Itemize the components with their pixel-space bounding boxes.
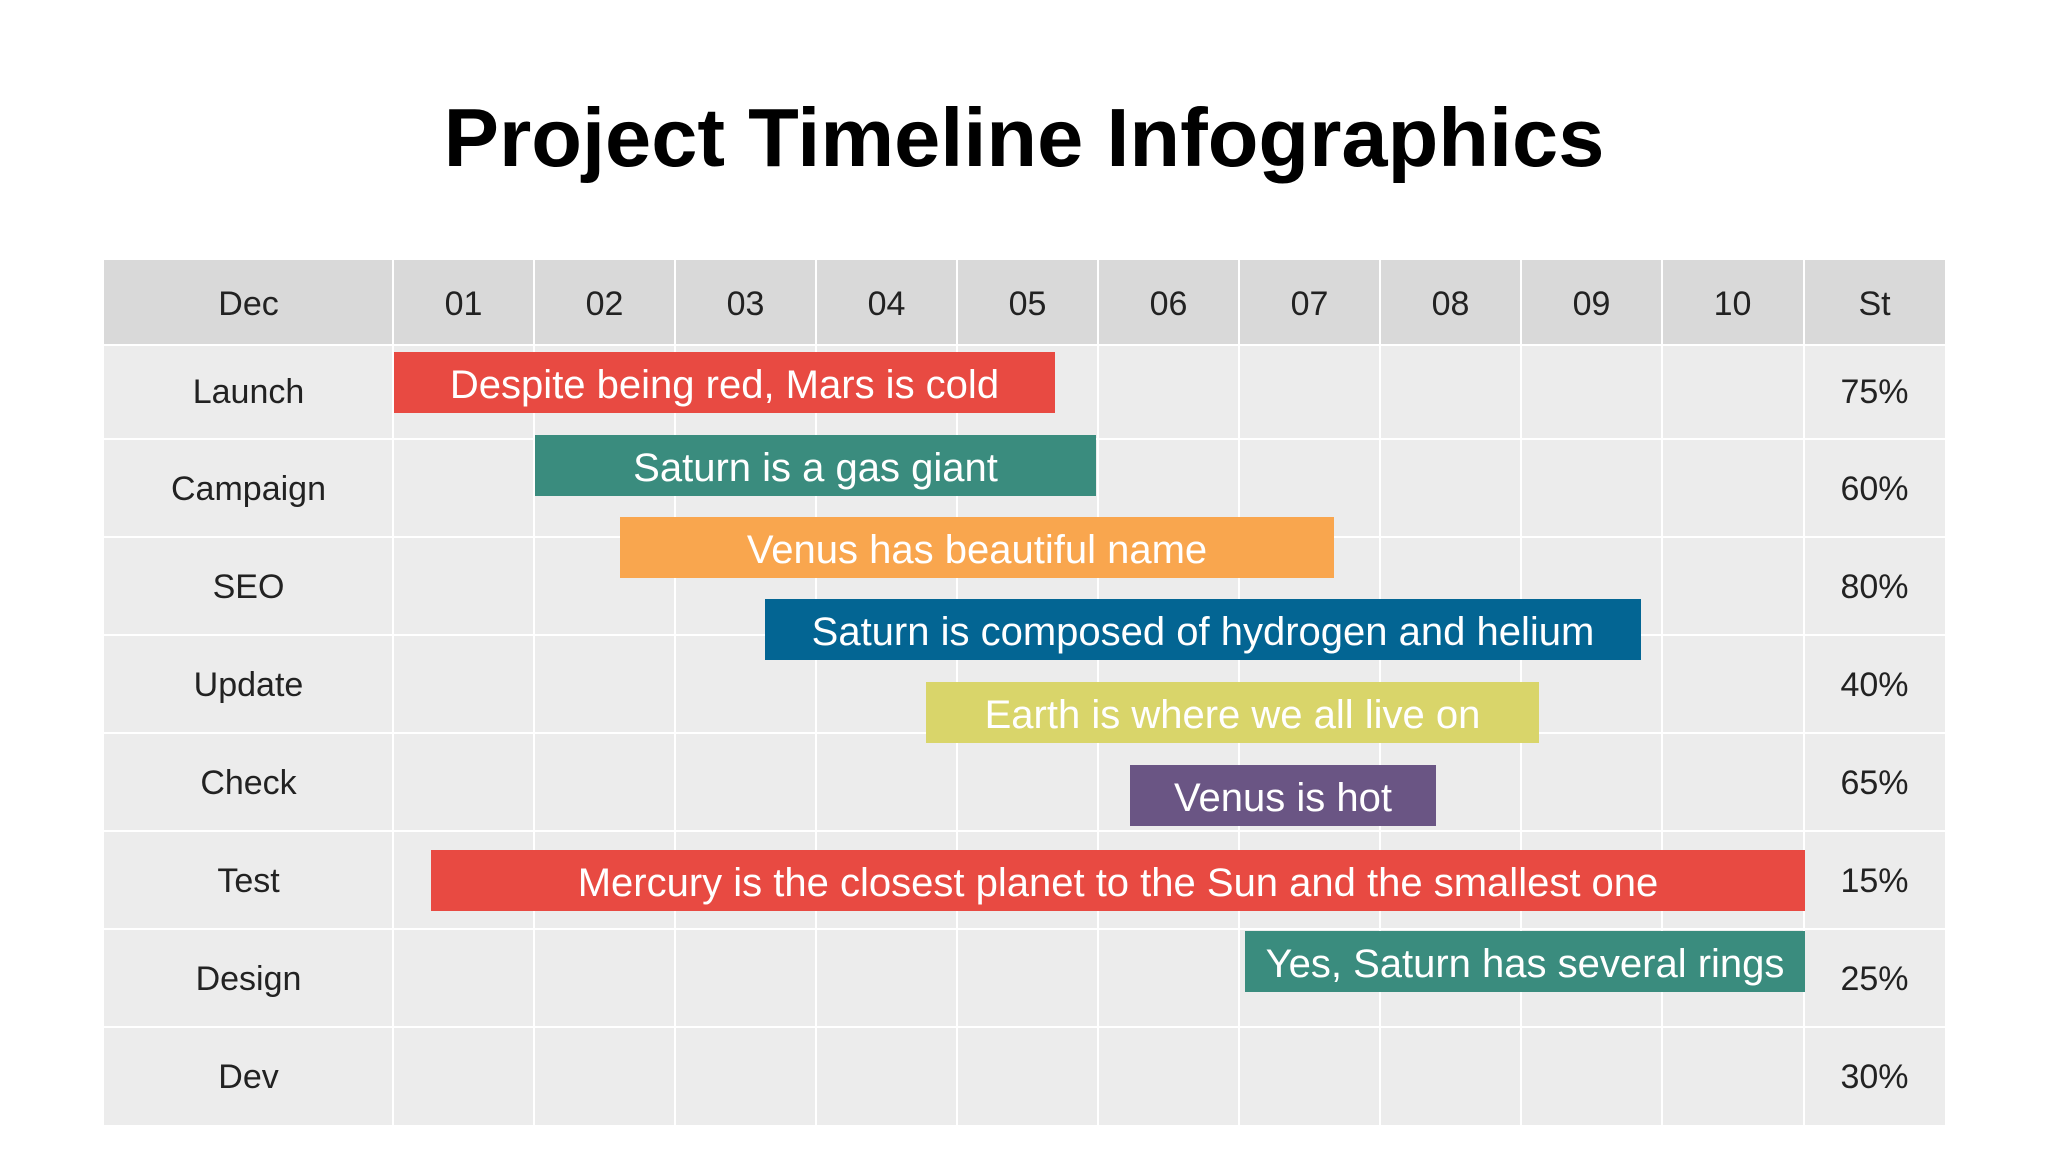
- row labels: Check: [200, 764, 297, 802]
- status column: 25%: [1840, 960, 1909, 998]
- gantt table: [104, 260, 1945, 1125]
- status column: [1840, 373, 1909, 1096]
- status column: 15%: [1840, 862, 1909, 900]
- bar: launch: Despite being red, Mars is cold: [450, 363, 999, 407]
- bar: saturn hydrogen: Saturn is composed of hydrogen and helium: [812, 610, 1594, 654]
- row labels: SEO: [213, 568, 284, 606]
- bar: venus: [620, 517, 1334, 578]
- status column: 30%: [1840, 1058, 1909, 1096]
- bar: mercury: Mercury is the closest planet to the Sun and the smallest one: [578, 861, 1658, 905]
- bar: launch: [394, 352, 1055, 413]
- row labels: Test: [217, 862, 280, 900]
- status column: 40%: [1840, 666, 1909, 704]
- header labels: 10: [1714, 285, 1751, 323]
- header labels: 02: [586, 285, 623, 323]
- bar: mercury: [431, 850, 1805, 911]
- bar: earth: Earth is where we all live on: [985, 693, 1480, 737]
- status column: 75%: [1840, 373, 1909, 411]
- bar: saturn hydrogen: [765, 599, 1641, 660]
- header labels: 04: [868, 285, 905, 323]
- row labels: Update: [194, 666, 303, 704]
- row labels: Dev: [218, 1058, 279, 1096]
- title: Project Timeline Infographics: [444, 91, 1604, 184]
- header labels: 09: [1573, 285, 1610, 323]
- header labels: 07: [1291, 285, 1328, 323]
- header labels: 01: [445, 285, 482, 323]
- row labels: Campaign: [171, 470, 326, 508]
- bar: campaign: [535, 435, 1096, 496]
- header row background: [104, 260, 1945, 345]
- row labels: Launch: [193, 373, 304, 411]
- bar: campaign: Saturn is a gas giant: [633, 446, 998, 490]
- row labels: Design: [196, 960, 301, 998]
- header labels: St: [1858, 285, 1891, 323]
- bar: saturn rings: Yes, Saturn has several rings: [1266, 942, 1784, 986]
- bar: venus hot: [1130, 765, 1436, 826]
- bar: earth: [926, 682, 1539, 743]
- header labels: Dec: [218, 285, 279, 323]
- header labels: 05: [1009, 285, 1046, 323]
- row labels: [171, 373, 326, 1096]
- status column: 65%: [1840, 764, 1909, 802]
- header labels: 08: [1432, 285, 1469, 323]
- header labels: [218, 285, 1891, 323]
- status column: 80%: [1840, 568, 1909, 606]
- bar: saturn rings: [1245, 931, 1805, 992]
- bar: venus hot: Venus is hot: [1174, 776, 1392, 820]
- header labels: 03: [727, 285, 764, 323]
- bar: venus: Venus has beautiful name: [747, 528, 1207, 572]
- header labels: 06: [1150, 285, 1187, 323]
- status column: 60%: [1840, 470, 1909, 508]
